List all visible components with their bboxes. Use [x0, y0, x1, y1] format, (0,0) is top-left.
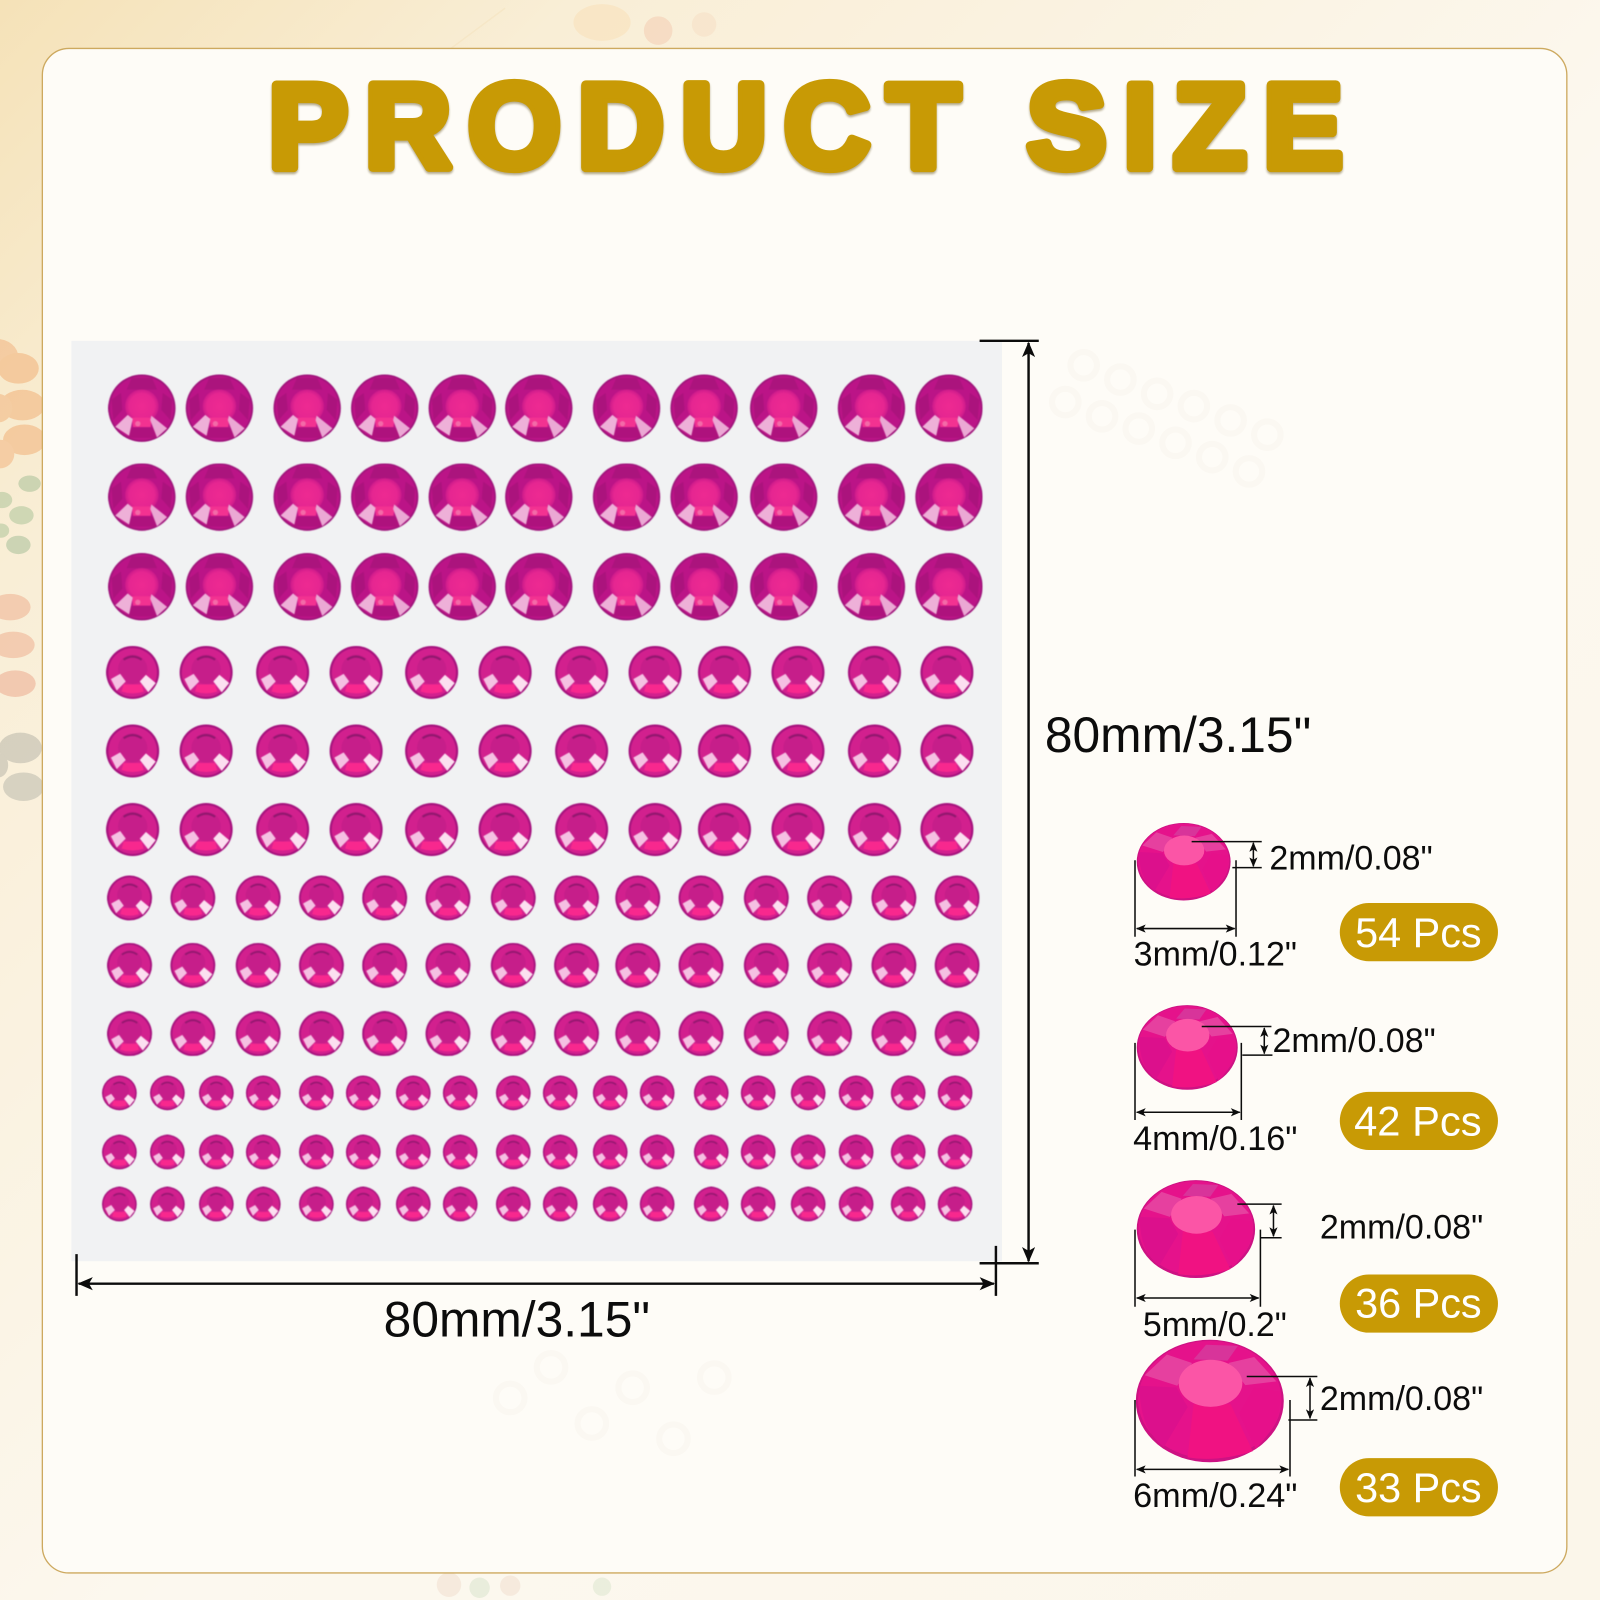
pill: 36 pcs: 36 Pcs	[1355, 1280, 1482, 1326]
dimension lines: 4mm gem	[1135, 1027, 1272, 1120]
label: diameter: 5mm/0.2"	[1143, 1306, 1287, 1344]
rhinestones: 4mm, 42 pcs	[107, 876, 980, 1056]
icon: 3mm gem	[1137, 823, 1231, 901]
pill: 42 pcs: 42 Pcs	[1354, 1099, 1482, 1145]
dimension lines: 5mm gem	[1135, 1204, 1282, 1307]
arrow: sheet width dimension	[77, 1246, 996, 1296]
pill: 54 pcs: 54 Pcs	[1355, 910, 1482, 956]
detail: 3mm rhinestone	[1134, 823, 1498, 973]
label: sheet height: 80mm/3.15"	[1045, 707, 1311, 763]
title: PRODUCT SIZE	[268, 60, 1343, 193]
rhinestones: 3mm, 54 pcs	[102, 1076, 972, 1221]
icon: 6mm gem	[1136, 1340, 1284, 1462]
pill: 54 pcs	[1340, 903, 1498, 961]
label: diameter: 4mm/0.16"	[1133, 1120, 1297, 1158]
faint decorative rings	[496, 352, 1281, 1453]
icon: 5mm gem	[1137, 1180, 1255, 1278]
label: height: 2mm/0.08"	[1269, 839, 1433, 877]
dimension lines: 3mm gem	[1135, 842, 1262, 937]
panel: sticker sheet with rhinestones	[71, 341, 1002, 1261]
label: height: 2mm/0.08"	[1320, 1380, 1483, 1418]
detail: 4mm rhinestone	[1133, 1005, 1498, 1158]
pill: 36 pcs	[1340, 1274, 1498, 1333]
detail: 5mm rhinestone	[1135, 1180, 1498, 1344]
icon: 4mm gem	[1137, 1005, 1238, 1090]
label: diameter: 6mm/0.24"	[1133, 1477, 1297, 1515]
pill: 42 pcs	[1340, 1092, 1498, 1150]
label: height: 2mm/0.08"	[1272, 1022, 1436, 1060]
label: diameter: 3mm/0.12"	[1134, 935, 1297, 973]
arrow: sheet height dimension	[980, 341, 1039, 1263]
label: height: 2mm/0.08"	[1320, 1208, 1483, 1246]
label: sheet width: 80mm/3.15"	[384, 1292, 650, 1348]
rhinestones: 6mm, 33 pcs	[108, 374, 983, 620]
rhinestones: 5mm, 36 pcs	[106, 646, 973, 856]
pill: 33 pcs	[1340, 1458, 1498, 1516]
detail: 6mm rhinestone	[1133, 1340, 1498, 1516]
pill: 33 pcs: 33 Pcs	[1355, 1465, 1482, 1511]
dimension lines: 6mm gem	[1135, 1377, 1317, 1477]
